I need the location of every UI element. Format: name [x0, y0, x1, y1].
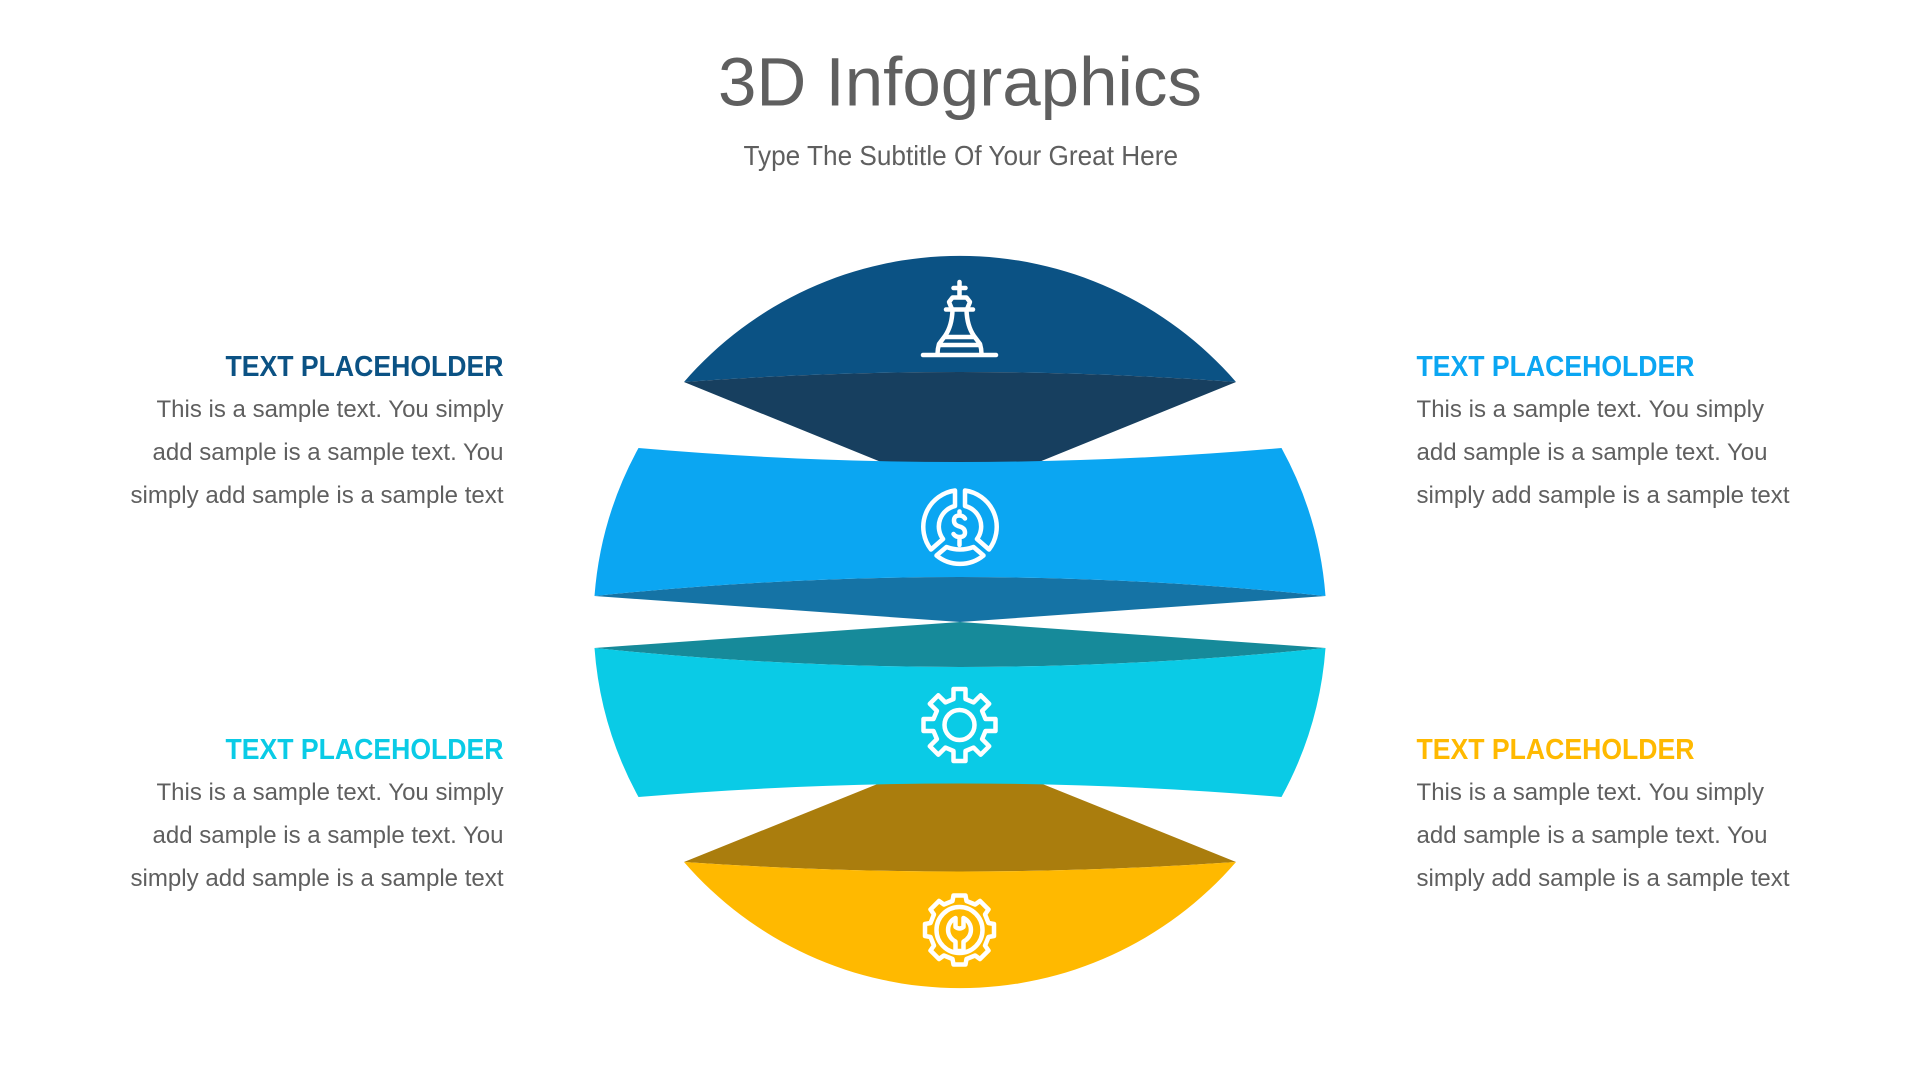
text block: bottom left: This is a sample text. You simply	[156, 779, 504, 806]
sphere: sliced segments	[594, 256, 1326, 988]
text block: bottom right: TEXT PLACEHOLDER	[1416, 734, 1695, 766]
text block: top left	[130, 351, 504, 509]
text block: top left: TEXT PLACEHOLDER	[226, 351, 504, 383]
text block: top right	[1416, 351, 1790, 509]
text block: top right: simply add sample is a sample text	[1416, 482, 1790, 509]
title: 3D Infographics	[718, 44, 1202, 120]
cyan band	[594, 648, 1326, 797]
top cap underside	[684, 372, 1236, 464]
text block: bottom left: TEXT PLACEHOLDER	[226, 734, 504, 766]
blue band underside	[594, 577, 1326, 622]
text block: top left: This is a sample text. You simply	[156, 396, 504, 423]
icon: chess king	[923, 282, 996, 355]
text block: top left: add sample is a sample text. You	[152, 439, 504, 466]
text block: top right: This is a sample text. You simply	[1416, 396, 1764, 423]
top cap	[684, 256, 1236, 382]
text block: top left: simply add sample is a sample text	[130, 482, 504, 509]
bottom cap	[684, 862, 1236, 988]
text block: bottom right: simply add sample is a sample text	[1416, 865, 1790, 892]
text block: bottom right: add sample is a sample text. You	[1416, 822, 1768, 849]
text block: bottom left: simply add sample is a sample text	[130, 865, 504, 892]
bottom cap underside	[684, 781, 1236, 872]
icon: gear with wrench	[925, 896, 994, 964]
text block: top right: TEXT PLACEHOLDER	[1416, 351, 1695, 383]
text block: bottom right: This is a sample text. You simply	[1416, 779, 1764, 806]
icon: dollar pie chart	[923, 490, 997, 564]
blue band	[594, 448, 1326, 596]
text block: bottom right	[1416, 734, 1790, 892]
text block: bottom left: add sample is a sample text. You	[152, 822, 504, 849]
text block: top right: add sample is a sample text. You	[1416, 439, 1768, 466]
icon: gear	[924, 689, 996, 761]
teal band underside	[594, 622, 1326, 667]
text block: bottom left	[130, 734, 504, 892]
subtitle: Type The Subtitle Of Your Great Here	[744, 140, 1178, 171]
